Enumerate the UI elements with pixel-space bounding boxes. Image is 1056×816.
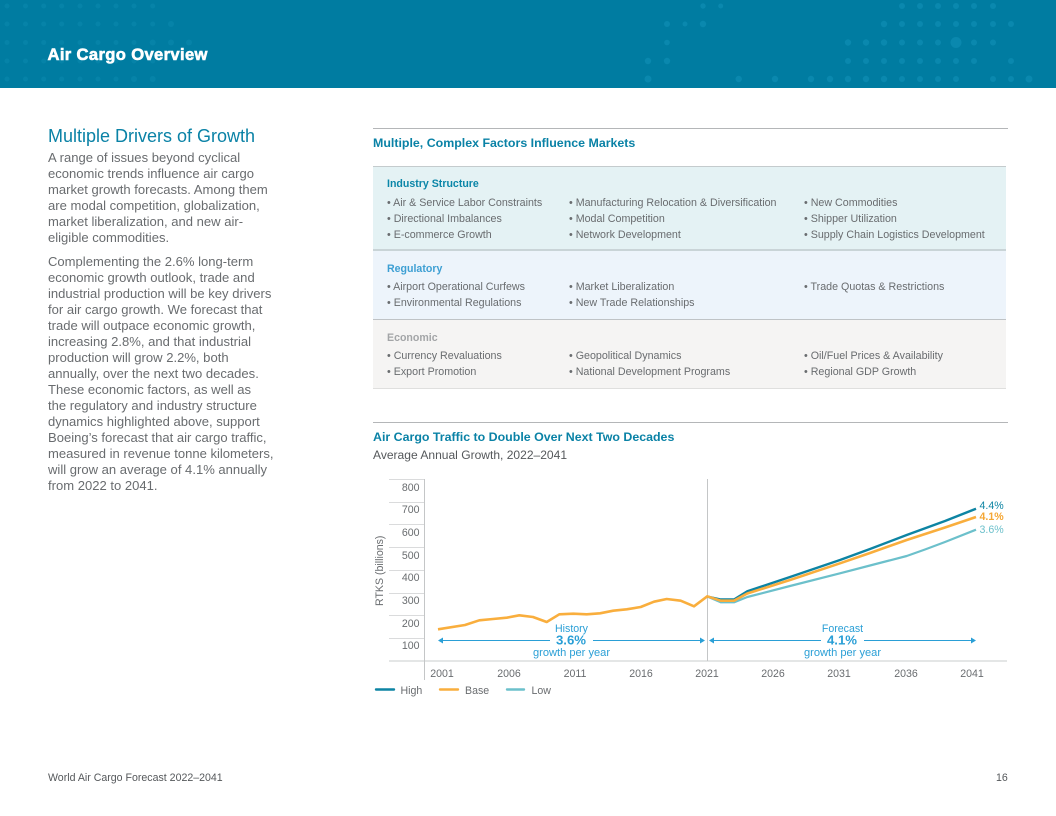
- legend: Low: [532, 685, 551, 697]
- series: base: [438, 517, 976, 629]
- panel: economic: • Currency Revaluations: [387, 350, 502, 362]
- x axis labels: 2011: [564, 668, 586, 680]
- header banner: [0, 0, 1056, 88]
- panel: economic: • National Development Programs: [569, 366, 730, 378]
- y axis labels: [402, 482, 420, 652]
- text block: intro paragraph: A range of issues beyond cyclical: [48, 150, 240, 165]
- text block: forecast paragraph: These economic factors, as well as: [48, 382, 251, 397]
- text block: forecast paragraph: industrial production will be key drivers: [48, 286, 271, 301]
- dot pattern: [644, 3, 1032, 82]
- panel: economic: • Export Promotion: [387, 366, 476, 378]
- text block: forecast paragraph: Boeing’s forecast that air cargo traffic,: [48, 430, 267, 445]
- text block: forecast paragraph: will grow an average of 4.1% annually: [48, 462, 267, 477]
- text block: forecast paragraph: measured in revenue tonne kilometers,: [48, 446, 274, 461]
- page title: Air Cargo Overview: [48, 45, 208, 64]
- end labels: 3.6%: [980, 524, 1004, 536]
- series: low forecast: [707, 530, 976, 602]
- panel: regulatory: [373, 251, 1006, 320]
- heading: air cargo traffic chart: Air Cargo Traffic to Double Over Next Two Decades: [373, 430, 674, 444]
- series: high forecast: [707, 509, 976, 600]
- text block: intro paragraph: economic trends influence air cargo: [48, 166, 254, 181]
- x axis labels: 2041: [960, 668, 984, 680]
- panel: industry structure: • Shipper Utilization: [804, 213, 897, 225]
- legend: High: [400, 685, 422, 697]
- text block: intro paragraph: are modal competition, globalization,: [48, 198, 260, 213]
- y axis labels: 200: [402, 618, 420, 630]
- text block: intro paragraph: market growth forecasts. Among them: [48, 182, 268, 197]
- x axis labels: [430, 668, 984, 680]
- y axis labels: 300: [402, 595, 420, 607]
- legend: [376, 685, 551, 697]
- y axis title: RTKS (billions): [374, 536, 386, 606]
- annotation: history: growth per year: [533, 647, 610, 659]
- text block: forecast paragraph: production will grow 2.2%, both: [48, 350, 229, 365]
- footer: page number: 16: [996, 772, 1008, 784]
- text block: forecast paragraph: the regulatory and industry structure: [48, 398, 257, 413]
- x axis labels: 2031: [827, 668, 851, 680]
- text block: forecast paragraph: annually, over the next two decades.: [48, 366, 259, 381]
- panel: economic: • Oil/Fuel Prices & Availability: [804, 350, 943, 362]
- text block: forecast paragraph: from 2022 to 2041.: [48, 478, 158, 493]
- text block: forecast paragraph: [48, 254, 274, 493]
- panel: industry structure: • Network Development: [569, 229, 681, 241]
- text block: intro paragraph: [48, 150, 268, 245]
- y axis labels: 100: [402, 640, 420, 652]
- panel: industry structure: • Modal Competition: [569, 213, 665, 225]
- text block: intro paragraph: eligible commodities.: [48, 230, 169, 245]
- chart subtitle: Average Annual Growth, 2022–2041: [373, 448, 567, 462]
- text block: intro paragraph: market liberalization, and new air-: [48, 214, 243, 229]
- text block: forecast paragraph: increasing 2.8%, and that industrial: [48, 334, 251, 349]
- panel: industry structure: • Supply Chain Logistics Development: [804, 229, 985, 241]
- text block: forecast paragraph: trade will outpace economic growth,: [48, 318, 255, 333]
- panel: economic: • Geopolitical Dynamics: [569, 350, 681, 362]
- panel: economic: [373, 320, 1006, 389]
- y axis labels: 600: [402, 527, 420, 539]
- panel: industry structure: • E-commerce Growth: [387, 229, 492, 241]
- panel heading: industry structure: Industry Structure: [387, 178, 479, 190]
- panel: economic: • Regional GDP Growth: [804, 366, 916, 378]
- panel: regulatory: • New Trade Relationships: [569, 297, 695, 309]
- panel: industry structure: • Air & Service Labor Constraints: [387, 197, 542, 209]
- panel: industry structure: [373, 166, 1006, 251]
- end labels: [980, 500, 1004, 536]
- y axis labels: 800: [402, 482, 420, 494]
- annotation: history: 3.6%: [556, 632, 586, 648]
- panel: industry structure: • Directional Imbalances: [387, 213, 502, 225]
- annotation: forecast: Forecast: [822, 623, 863, 635]
- legend: Base: [465, 685, 489, 697]
- annotation: history: History: [555, 623, 589, 635]
- annotation: forecast: growth per year: [804, 647, 881, 659]
- text block: forecast paragraph: Complementing the 2.6% long-term: [48, 254, 253, 269]
- x axis labels: 2001: [430, 668, 454, 680]
- panel heading: economic: Economic: [387, 332, 438, 344]
- panel: industry structure: • New Commodities: [804, 197, 897, 209]
- end labels: 4.4%: [980, 500, 1004, 512]
- heading: factors table: Multiple, Complex Factors Influence Markets: [373, 136, 635, 150]
- panel heading: regulatory: Regulatory: [387, 263, 442, 275]
- heading: multiple drivers of growth: Multiple Drivers of Growth: [48, 126, 255, 146]
- panel: regulatory: • Airport Operational Curfews: [387, 281, 525, 293]
- x axis labels: 2026: [761, 668, 785, 680]
- panel: regulatory: • Environmental Regulations: [387, 297, 521, 309]
- end labels: 4.1%: [980, 511, 1004, 523]
- text block: forecast paragraph: economic growth outlook, trade and: [48, 270, 255, 285]
- annotation: forecast: 4.1%: [827, 632, 857, 648]
- annotation: forecast: [709, 623, 976, 659]
- y axis labels: 500: [402, 550, 420, 562]
- text block: forecast paragraph: for air cargo growth. We forecast that: [48, 302, 262, 317]
- y axis labels: 700: [402, 504, 420, 516]
- text block: forecast paragraph: dynamics highlighted above, support: [48, 414, 260, 429]
- x axis labels: 2036: [894, 668, 918, 680]
- annotation: history: [438, 623, 705, 659]
- x axis labels: 2006: [497, 668, 521, 680]
- panel: regulatory: • Trade Quotas & Restrictions: [804, 281, 944, 293]
- panel: regulatory: • Market Liberalization: [569, 281, 674, 293]
- x axis labels: 2021: [695, 668, 719, 680]
- x axis labels: 2016: [629, 668, 653, 680]
- panel: industry structure: • Manufacturing Relocation & Diversification: [569, 197, 776, 209]
- y axis labels: 400: [402, 572, 420, 584]
- footer: publication title: World Air Cargo Forecast 2022–2041: [48, 772, 223, 784]
